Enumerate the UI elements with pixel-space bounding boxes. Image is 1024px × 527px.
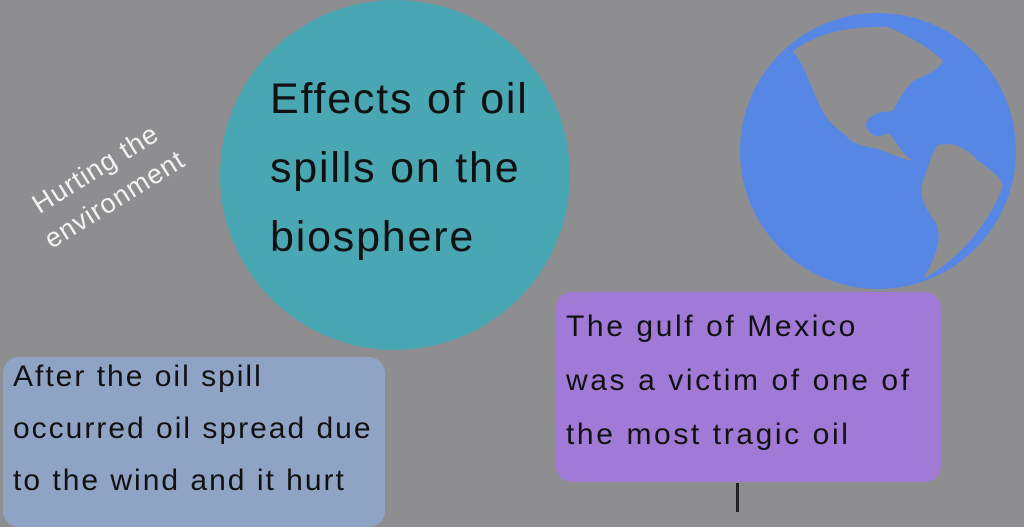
rotated label: hurting the environment: Hurting the bbox=[27, 118, 164, 219]
title: spills on the bbox=[270, 144, 520, 192]
text box: gulf of Mexico: The gulf of Mexico bbox=[566, 310, 858, 343]
text box: oil spread: occurred oil spread due bbox=[13, 412, 373, 445]
text box: oil spread: to the wind and it hurt bbox=[13, 464, 346, 497]
icon: globe bbox=[740, 13, 1016, 289]
title: biosphere bbox=[270, 213, 475, 261]
rotated label: hurting the environment: environment bbox=[39, 144, 190, 254]
text box: gulf of Mexico bbox=[556, 292, 941, 482]
text box: oil spread: After the oil spill bbox=[13, 360, 263, 393]
title: Effects of oil bbox=[270, 75, 529, 123]
title bbox=[270, 75, 529, 261]
title circle bbox=[220, 0, 570, 350]
connector line bbox=[736, 483, 739, 512]
text box: gulf of Mexico: was a victim of one of bbox=[566, 364, 912, 397]
text box: oil spread bbox=[3, 357, 385, 527]
text box: gulf of Mexico: the most tragic oil bbox=[566, 418, 850, 451]
